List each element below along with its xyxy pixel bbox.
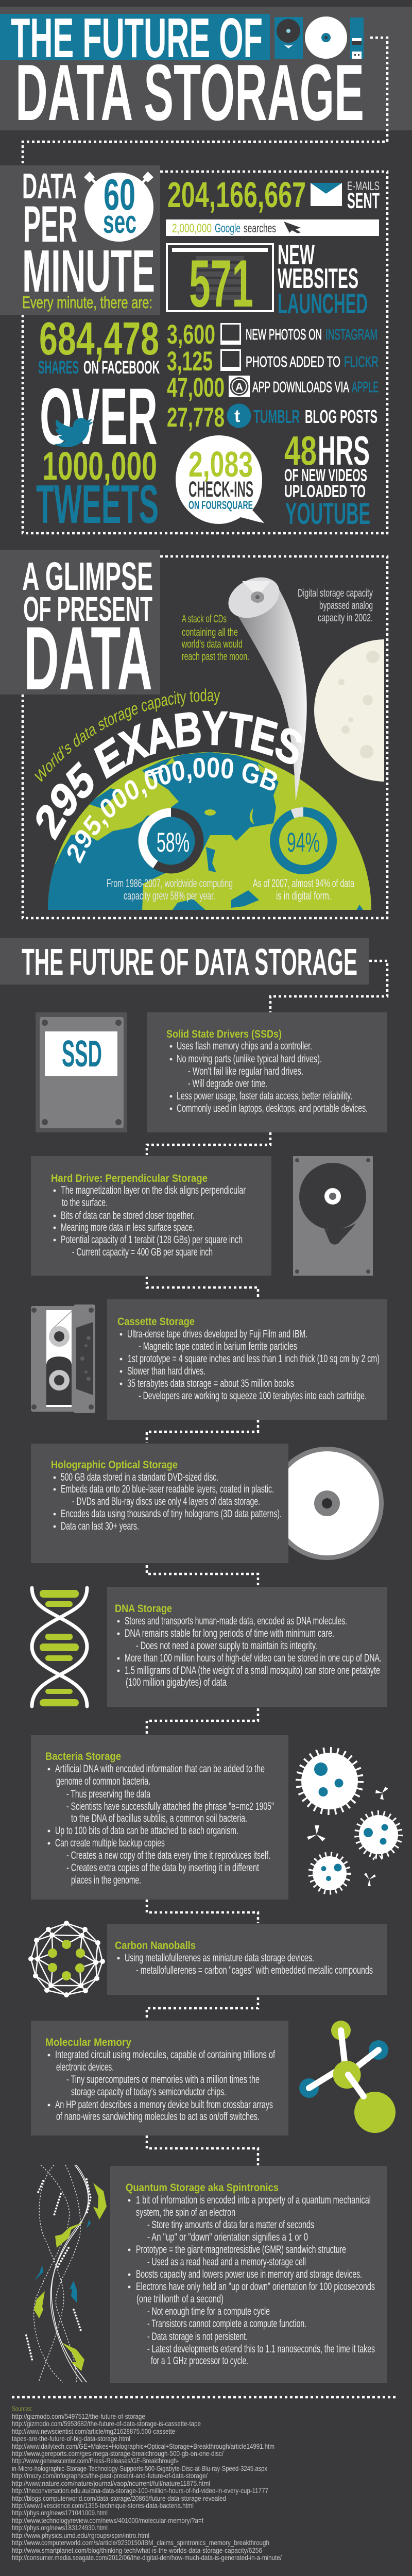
text: sources list: http://www.nature.com/nature/journal/vaop/ncurrent/full/nature11875.html xyxy=(12,2480,210,2487)
panel: carbon nanoballs xyxy=(107,1924,387,1995)
panel: quantum storage: (one trillionth of a second) xyxy=(136,2293,224,2305)
panel: bacteria storage: genome of common bacteria. xyxy=(56,1775,150,1787)
icon: cursor xyxy=(284,222,301,233)
connector: carbon to molecular xyxy=(147,1997,258,2020)
icon: stopwatch 60 sec: sec xyxy=(103,205,136,240)
panel: molecular memory: Integrated circuit using molecules, capable of containing trillions of xyxy=(55,2049,275,2061)
text: sources list: http://www.physics.umd.edu/rgroups/spin/intro.html xyxy=(12,2532,149,2539)
stat: youtube hours: UPLOADED TO xyxy=(284,482,366,501)
panel: quantum storage: Quantum Storage aka Spintronics xyxy=(126,2182,279,2194)
text: digital form caption: is in digital form. xyxy=(276,889,331,902)
icon: compact disc xyxy=(305,16,347,59)
text: digital storage capacity: Digital storage capacity xyxy=(298,587,373,599)
stat: apple downloads xyxy=(167,372,379,403)
chart: 94 percent donut: 94% xyxy=(287,827,320,858)
text: curved capacity label: World's data storage capacity today xyxy=(34,688,220,782)
stat: flickr photos: 3,125 xyxy=(167,346,213,377)
stat: google searches: searches xyxy=(244,222,276,235)
stat: emails sent: E-MAILS xyxy=(347,179,380,193)
chart: 58 percent donut: 58% xyxy=(157,827,190,858)
stat: emails sent: 204,166,667 xyxy=(167,175,306,215)
panel: dna storage xyxy=(107,1587,387,1707)
text: sources list: http://gizmodo.com/5953682/the-future-of-data-storage-is-cassette-tape xyxy=(12,2420,201,2428)
panel: bacteria storage xyxy=(31,1735,288,1900)
panel: hard drive perpendicular storage: Potential capacity of 1 terabit (128 GBs) per square inch xyxy=(61,1234,243,1246)
stat: tumblr posts: TUMBLR xyxy=(253,406,300,427)
stat: instagram photos: NEW PHOTOS ON xyxy=(246,327,322,343)
panel: hard drive perpendicular storage: Hard Drive: Perpendicular Storage xyxy=(51,1173,208,1184)
icon: ssd xyxy=(36,1012,127,1132)
panel: holographic optical storage: Holographic Optical Storage xyxy=(51,1459,178,1471)
stat: emails sent: SENT xyxy=(347,189,380,213)
panel: quantum storage xyxy=(110,2166,387,2383)
text: stack of cds: A stack of CDs xyxy=(182,613,227,625)
stat: over one million tweets: OVER xyxy=(40,372,158,462)
text: sources list: http://www.smartplanet.com/blog/thinking-tech/what-is-the-worlds-data-storage-capacity/6256 xyxy=(12,2547,262,2554)
text: computing capacity caption: capacity grew 58% per year. xyxy=(124,889,215,902)
icon: hard drive xyxy=(274,17,303,59)
panel: glimpse heading: OF PRESENT xyxy=(23,590,152,629)
panel: bacteria storage: to the DNA of bacillus subtilis, a common soil bacteria. xyxy=(71,1812,247,1824)
text: sources list: http://mozy.com/infographics/the-past-present-and-future-of-data-storage/ xyxy=(12,2472,208,2480)
panel: molecular memory xyxy=(31,2021,288,2136)
text: sources list: http://www.technologyreview.com/news/401000/molecular-memory/?a=f xyxy=(12,2517,203,2524)
panel: quantum storage: - Data storage is not persistent. xyxy=(147,2331,248,2343)
callout: foursquare check-ins: ON FOURSQUARE xyxy=(188,499,253,512)
stat: flickr photos: FLICKR xyxy=(344,354,379,370)
text: sources list: Sources: xyxy=(12,2405,32,2413)
panel: bacteria storage: - Creates extra copies of the data by inserting it in different xyxy=(66,1862,259,1874)
text: sources list: http://www.newscientist.com/article/mg21628875.500-cassette- xyxy=(12,2428,177,2435)
stat: flickr photos: PHOTOS ADDED TO xyxy=(246,354,340,370)
panel: hard drive perpendicular storage: The magnetization layer on the disk aligns perpendicular xyxy=(61,1184,246,1196)
panel: hard drive perpendicular storage: Meaning more data in less surface space. xyxy=(61,1222,195,1233)
panel: holographic optical storage xyxy=(31,1444,288,1563)
panel: holographic optical storage: Encodes data using thousands of tiny holograms (3D data patterns). xyxy=(61,1508,282,1520)
panel: holographic optical storage: 500 GB data stored in a standard DVD-sized disc. xyxy=(61,1471,218,1483)
panel: quantum storage: - Used as a read head and a memory-storage cell xyxy=(147,2256,306,2268)
connector: molecular to quantum xyxy=(147,2136,258,2165)
panel: bacteria storage: - Creates a new copy of the data every time it reproduces itself. xyxy=(66,1850,270,1861)
stat: facebook shares: 684,478 xyxy=(39,313,159,365)
illustration: spintronics strands xyxy=(26,2165,107,2382)
panel: dna storage: (100 million gigabytes) of data xyxy=(126,1676,227,1688)
callout: foursquare check-ins: CHECK-INS xyxy=(188,477,253,502)
stat: instagram photos: 3,600 xyxy=(167,319,215,350)
panel: holographic optical storage: Embeds data onto 20 blue-laser readable layers, coated in plastic. xyxy=(61,1483,274,1495)
panel: quantum storage: for a 1 GHz processor to cycle. xyxy=(151,2355,248,2367)
panel: carbon nanoballs: Using metallofullerenes as miniature data storage devices. xyxy=(125,1952,314,1964)
icon: molecule xyxy=(299,2021,396,2133)
text: digital form caption xyxy=(253,877,354,902)
icon: app store: A xyxy=(235,381,243,393)
illustration: cd stack reaching the moon xyxy=(222,569,307,802)
panel: solid state drives: - Won't fail like regular hard drives. xyxy=(188,1065,303,1077)
stat: google searches: 2,000,000 xyxy=(172,222,212,235)
callout: foursquare check-ins xyxy=(176,435,264,524)
panel: molecular memory: Molecular Memory xyxy=(45,2037,131,2048)
panel: molecular memory: An HP patent describes a memory device built from crossbar arrays xyxy=(55,2099,273,2111)
connector: dna to bacteria xyxy=(147,1708,258,1735)
text: sources list: http://www.gereports.com/ges-mega-storage-breakthrough-500-gb-on-one-disc/ xyxy=(12,2450,224,2458)
panel: dna storage: DNA Storage xyxy=(115,1603,172,1615)
icon: envelope xyxy=(311,183,342,206)
panel: molecular memory: of nano-wires sandwiching molecules to act as on/off switches. xyxy=(56,2111,260,2123)
connector: ssd to hard drive xyxy=(147,1132,270,1155)
icon: twitter bird xyxy=(54,418,93,447)
panel: quantum storage: - Not enough time for a compute cycle xyxy=(147,2306,270,2317)
text: sources list: http://www.computerworld.com/s/article/9230150/IBM_claims_spintronics_memory_breakthrough xyxy=(12,2539,269,2547)
panel: glimpse heading xyxy=(0,550,160,709)
text: sources list: http://www.dailytech.com/GE+Makes+Holographic+Optical+Storage+Breakthrough/article14991.htm xyxy=(12,2443,274,2450)
panel: bacteria storage: - Scientists have successfully attached the phrase "e=mc2 1905" xyxy=(66,1801,274,1812)
panel: quantum storage: - Store tiny amounts of data for a matter of seconds xyxy=(147,2219,314,2231)
text: stack of cds: containing all the xyxy=(182,626,238,638)
panel: bacteria storage: places in the genome. xyxy=(71,1874,141,1886)
stat: google searches xyxy=(166,219,379,236)
panel: holographic optical storage: - DVDs and Blu-ray discs use only 4 layers of data storage. xyxy=(72,1496,260,1507)
text: sources list: http://www.genewscenter.com/Press-Releases/GE-Breakthrough- xyxy=(12,2457,179,2465)
illustration: moon xyxy=(314,639,384,782)
icon: dna helix xyxy=(32,1588,87,1706)
connector: cassette to holographic xyxy=(147,1420,258,1443)
icon: tumblr: t xyxy=(234,406,240,426)
connector: heading to ssd xyxy=(270,961,387,1012)
text: digital storage capacity xyxy=(298,587,373,624)
frame: glimpse of present data xyxy=(23,556,387,918)
icon: tumblr xyxy=(227,404,251,428)
panel: solid state drives: Solid State Drivers (SSDs) xyxy=(166,1028,282,1040)
panel: quantum storage: system, the spin of an electron xyxy=(136,2207,235,2218)
panel: solid state drives xyxy=(147,1012,387,1132)
icon: equals sign xyxy=(145,767,163,776)
icon: cassette xyxy=(31,1304,95,1413)
stat: google searches: Google xyxy=(215,222,241,235)
icon: ssd: SSD xyxy=(62,1033,102,1075)
callout: foursquare check-ins: 2,083 xyxy=(188,444,253,484)
text: curved 295 exabytes: 295 EXABYTES xyxy=(36,711,302,841)
text: sources list: http://phys.org/news171041009.html xyxy=(12,2509,108,2517)
stat: over one million tweets: TWEETS xyxy=(36,474,159,535)
icon: carbon nanoball xyxy=(28,1921,105,1997)
chart: 94 percent donut xyxy=(274,812,332,870)
icon: photo frame xyxy=(220,349,241,371)
icon: optical disc xyxy=(270,1447,384,1560)
stat: tumblr posts: 27,778 xyxy=(167,402,225,433)
icon: stopwatch 60 sec xyxy=(84,171,153,242)
panel: glimpse heading: A GLIMPSE xyxy=(22,554,153,599)
stat: new websites launched: NEW xyxy=(278,239,315,270)
text: sources list xyxy=(12,2405,282,2562)
stat: facebook shares xyxy=(38,313,160,378)
stat: youtube hours: 48 xyxy=(284,428,317,473)
panel: data per minute heading: MINUTE xyxy=(22,238,155,304)
panel: molecular memory: electronic devices. xyxy=(56,2061,114,2073)
stat: apple downloads: APP DOWNLOADS VIA xyxy=(252,379,349,396)
panel: data per minute heading xyxy=(0,165,160,315)
panel: solid state drives: - Will degrade over time. xyxy=(188,1078,267,1090)
connector: holographic to dna xyxy=(147,1565,258,1587)
stat: apple downloads: 47,000 xyxy=(167,372,225,403)
text: digital form caption: As of 2007, almost 94% of data xyxy=(253,877,354,890)
stat: over one million tweets xyxy=(36,372,159,535)
text: computing capacity caption xyxy=(107,877,233,902)
panel: cassette storage: 35 terabytes data storage = about 35 million books xyxy=(127,1378,294,1389)
text: sources list: http://consumer.media.seagate.com/2012/06/the-digital-den/how-much-data-is-generated-in-a-minute/ xyxy=(12,2554,282,2562)
stat: youtube hours: HRS xyxy=(318,428,370,473)
panel: solid state drives: No moving parts (unlike typical hard drives). xyxy=(177,1053,322,1065)
icon: photo frame xyxy=(220,323,241,345)
text: sources list: http://phys.org/news183124930.html xyxy=(12,2524,108,2532)
stat: new websites launched: 571 xyxy=(189,246,253,321)
connector: header to data per minute xyxy=(23,38,387,165)
panel: hard drive perpendicular storage xyxy=(31,1156,271,1276)
panel: bacteria storage: - Thus preserving the data xyxy=(66,1788,150,1800)
panel: quantum storage: - An "up" or "down" orientation signifies a 1 or 0 xyxy=(147,2231,308,2243)
illustration: earth xyxy=(45,750,376,912)
panel: bacteria storage: Can create multiple backup copies xyxy=(55,1837,165,1849)
panel: cassette storage: Cassette Storage xyxy=(117,1316,195,1328)
panel: bacteria storage: Artificial DNA with encoded information that can be added to the xyxy=(55,1763,265,1775)
connector: bacteria to carbon xyxy=(147,1900,258,1923)
icon: bacteria xyxy=(299,1750,400,1892)
text: digital storage capacity: bypassed analog xyxy=(319,600,373,612)
panel: molecular memory: storage capacity of today's semiconductor chips. xyxy=(71,2086,226,2098)
text: sources list: tapes-are-the-future-of-big-data-storage.html xyxy=(12,2435,130,2443)
text: digital storage capacity: capacity in 2002. xyxy=(318,612,373,624)
chart: 58 percent donut xyxy=(143,812,199,869)
panel: hard drive perpendicular storage: to the surface. xyxy=(62,1197,108,1209)
panel: glimpse heading: DATA xyxy=(24,608,152,709)
panel: bacteria storage: Bacteria Storage xyxy=(45,1751,121,1762)
panel: solid state drives: Uses flash memory chips and a controller. xyxy=(177,1040,312,1052)
stat: tumblr posts xyxy=(167,402,377,433)
stat: over one million tweets: 1000,000 xyxy=(42,444,157,488)
panel: holographic optical storage: Data can last 30+ years. xyxy=(61,1520,139,1532)
stat: youtube hours xyxy=(284,428,370,531)
header: title band xyxy=(0,7,412,137)
panel: bacteria storage: Up to 100 bits of data can be attached to each organism. xyxy=(55,1825,238,1837)
stat: facebook shares: ON FACEBOOK xyxy=(83,358,160,378)
panel: data per minute heading: PER xyxy=(23,195,77,252)
text: computing capacity caption: From 1986-2007, worldwide computing xyxy=(107,877,233,890)
text: sources list: http://www.livescience.com/1355-technique-stores-data-bacteria.html xyxy=(12,2502,194,2510)
text: stack of cds xyxy=(181,613,249,663)
text: curved gigabytes: 295,000,000,000 GB xyxy=(67,757,277,863)
sources separator xyxy=(12,2396,398,2398)
stat: new websites launched xyxy=(167,239,368,321)
text: sources list: http://blogs.computerworld.com/data-storage/20865/future-data-storage-revealed xyxy=(12,2495,226,2502)
panel: data per minute heading: Every minute, there are: xyxy=(22,293,152,312)
stat: facebook shares: SHARES xyxy=(38,358,79,378)
panel: carbon nanoballs: Carbon Nanoballs xyxy=(115,1940,196,1952)
panel: cassette storage: Slower than hard drives. xyxy=(127,1365,205,1377)
panel: dna storage: - Does not need a power supply to maintain its integrity. xyxy=(136,1640,317,1652)
text: sources list: in-Micro-holographic-Storage-Technology-Supports-500-Gigabyte-Disc-at-Blu-ray-Speed-3245.aspx xyxy=(12,2465,267,2472)
stat: instagram photos: INSTAGRAM xyxy=(325,327,377,343)
text: sources list: http://gizmodo.com/5497512/the-future-of-storage xyxy=(12,2413,145,2420)
frame: data per minute xyxy=(23,172,387,533)
stat: apple downloads: APPLE xyxy=(352,379,379,396)
text: stack of cds: reach past the moon. xyxy=(182,651,249,663)
icon: hard disk xyxy=(293,1156,373,1276)
panel: quantum storage: - Transistors cannot complete a compute function. xyxy=(147,2318,306,2330)
panel: cassette storage: Ultra-dense tape drives developed by Fuji Film and IBM. xyxy=(127,1328,307,1340)
icon: stopwatch 60 sec: 60 xyxy=(104,171,135,219)
stat: flickr photos xyxy=(167,346,379,377)
panel: hard drive perpendicular storage: - Current capacity = 400 GB per square inch xyxy=(72,1246,213,1258)
panel: cassette storage xyxy=(107,1299,387,1420)
panel: molecular memory: - Tiny supercomputers or memories with a million times the xyxy=(66,2074,260,2086)
stat: instagram photos xyxy=(167,319,377,350)
icon: usb drive xyxy=(350,18,364,59)
connector: hard drive to cassette xyxy=(147,1277,258,1299)
icon: app store xyxy=(229,376,250,397)
panel: cassette storage: - Magnetic tape coated in barium ferrite particles xyxy=(139,1341,297,1352)
text: stack of cds: world's data would xyxy=(181,638,243,650)
panel: data per minute heading: DATA xyxy=(22,166,77,206)
text: sources list: http://theconversation.edu.au/dna-data-storage-100-million-hours-of-hd-video-in-every-cup-11777 xyxy=(12,2487,268,2495)
panel: hard drive perpendicular storage: Bits of data can be stored closer together. xyxy=(61,1210,195,1222)
